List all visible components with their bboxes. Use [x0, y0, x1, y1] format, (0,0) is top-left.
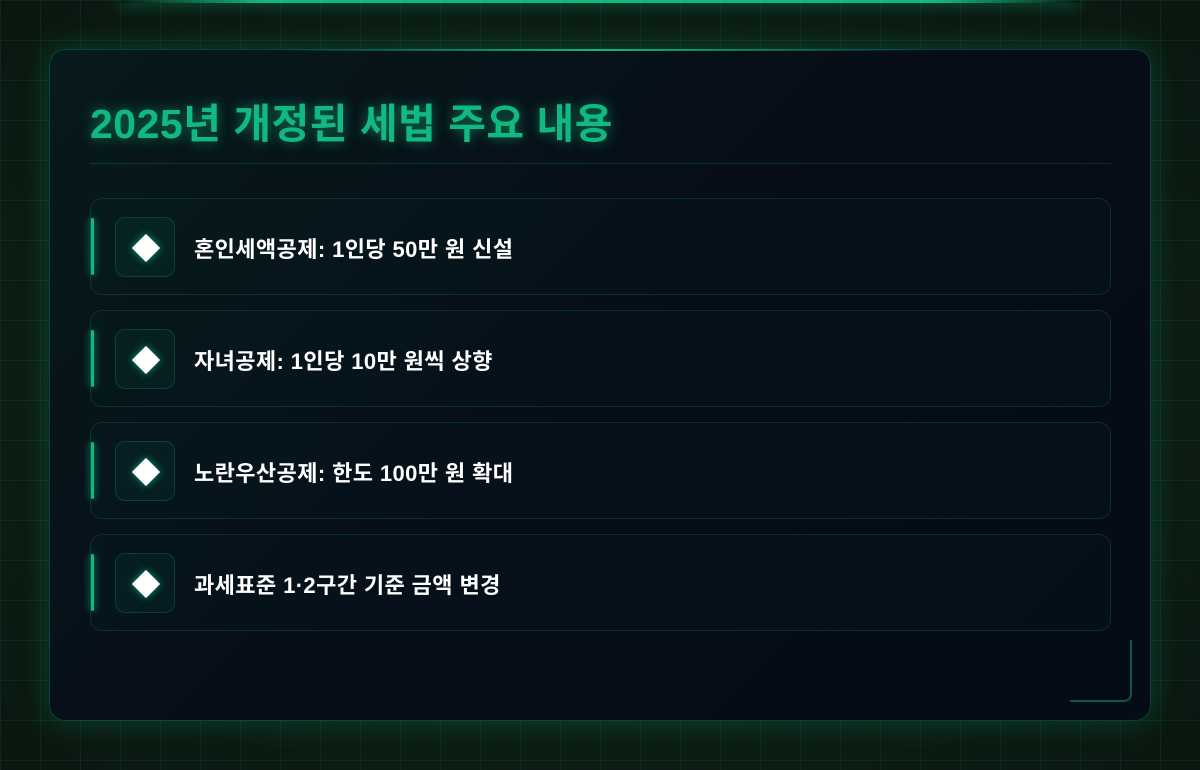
item: tax bracket	[90, 534, 1111, 631]
item: child deduction: 자녀공제: 1인당 10만 원씩 상향	[194, 349, 493, 374]
title: 2025년 개정된 세법 주요 내용	[90, 101, 613, 147]
corner decoration	[1070, 640, 1132, 702]
item: marriage credit: 혼인세액공제: 1인당 50만 원 신설	[194, 237, 513, 262]
item: yellow umbrella: 노란우산공제: 한도 100만 원 확대	[194, 461, 513, 486]
item: yellow umbrella	[90, 422, 1111, 519]
item: child deduction	[90, 310, 1111, 407]
item: marriage credit	[90, 198, 1111, 295]
item: tax bracket: 과세표준 1·2구간 기준 금액 변경	[194, 573, 501, 598]
